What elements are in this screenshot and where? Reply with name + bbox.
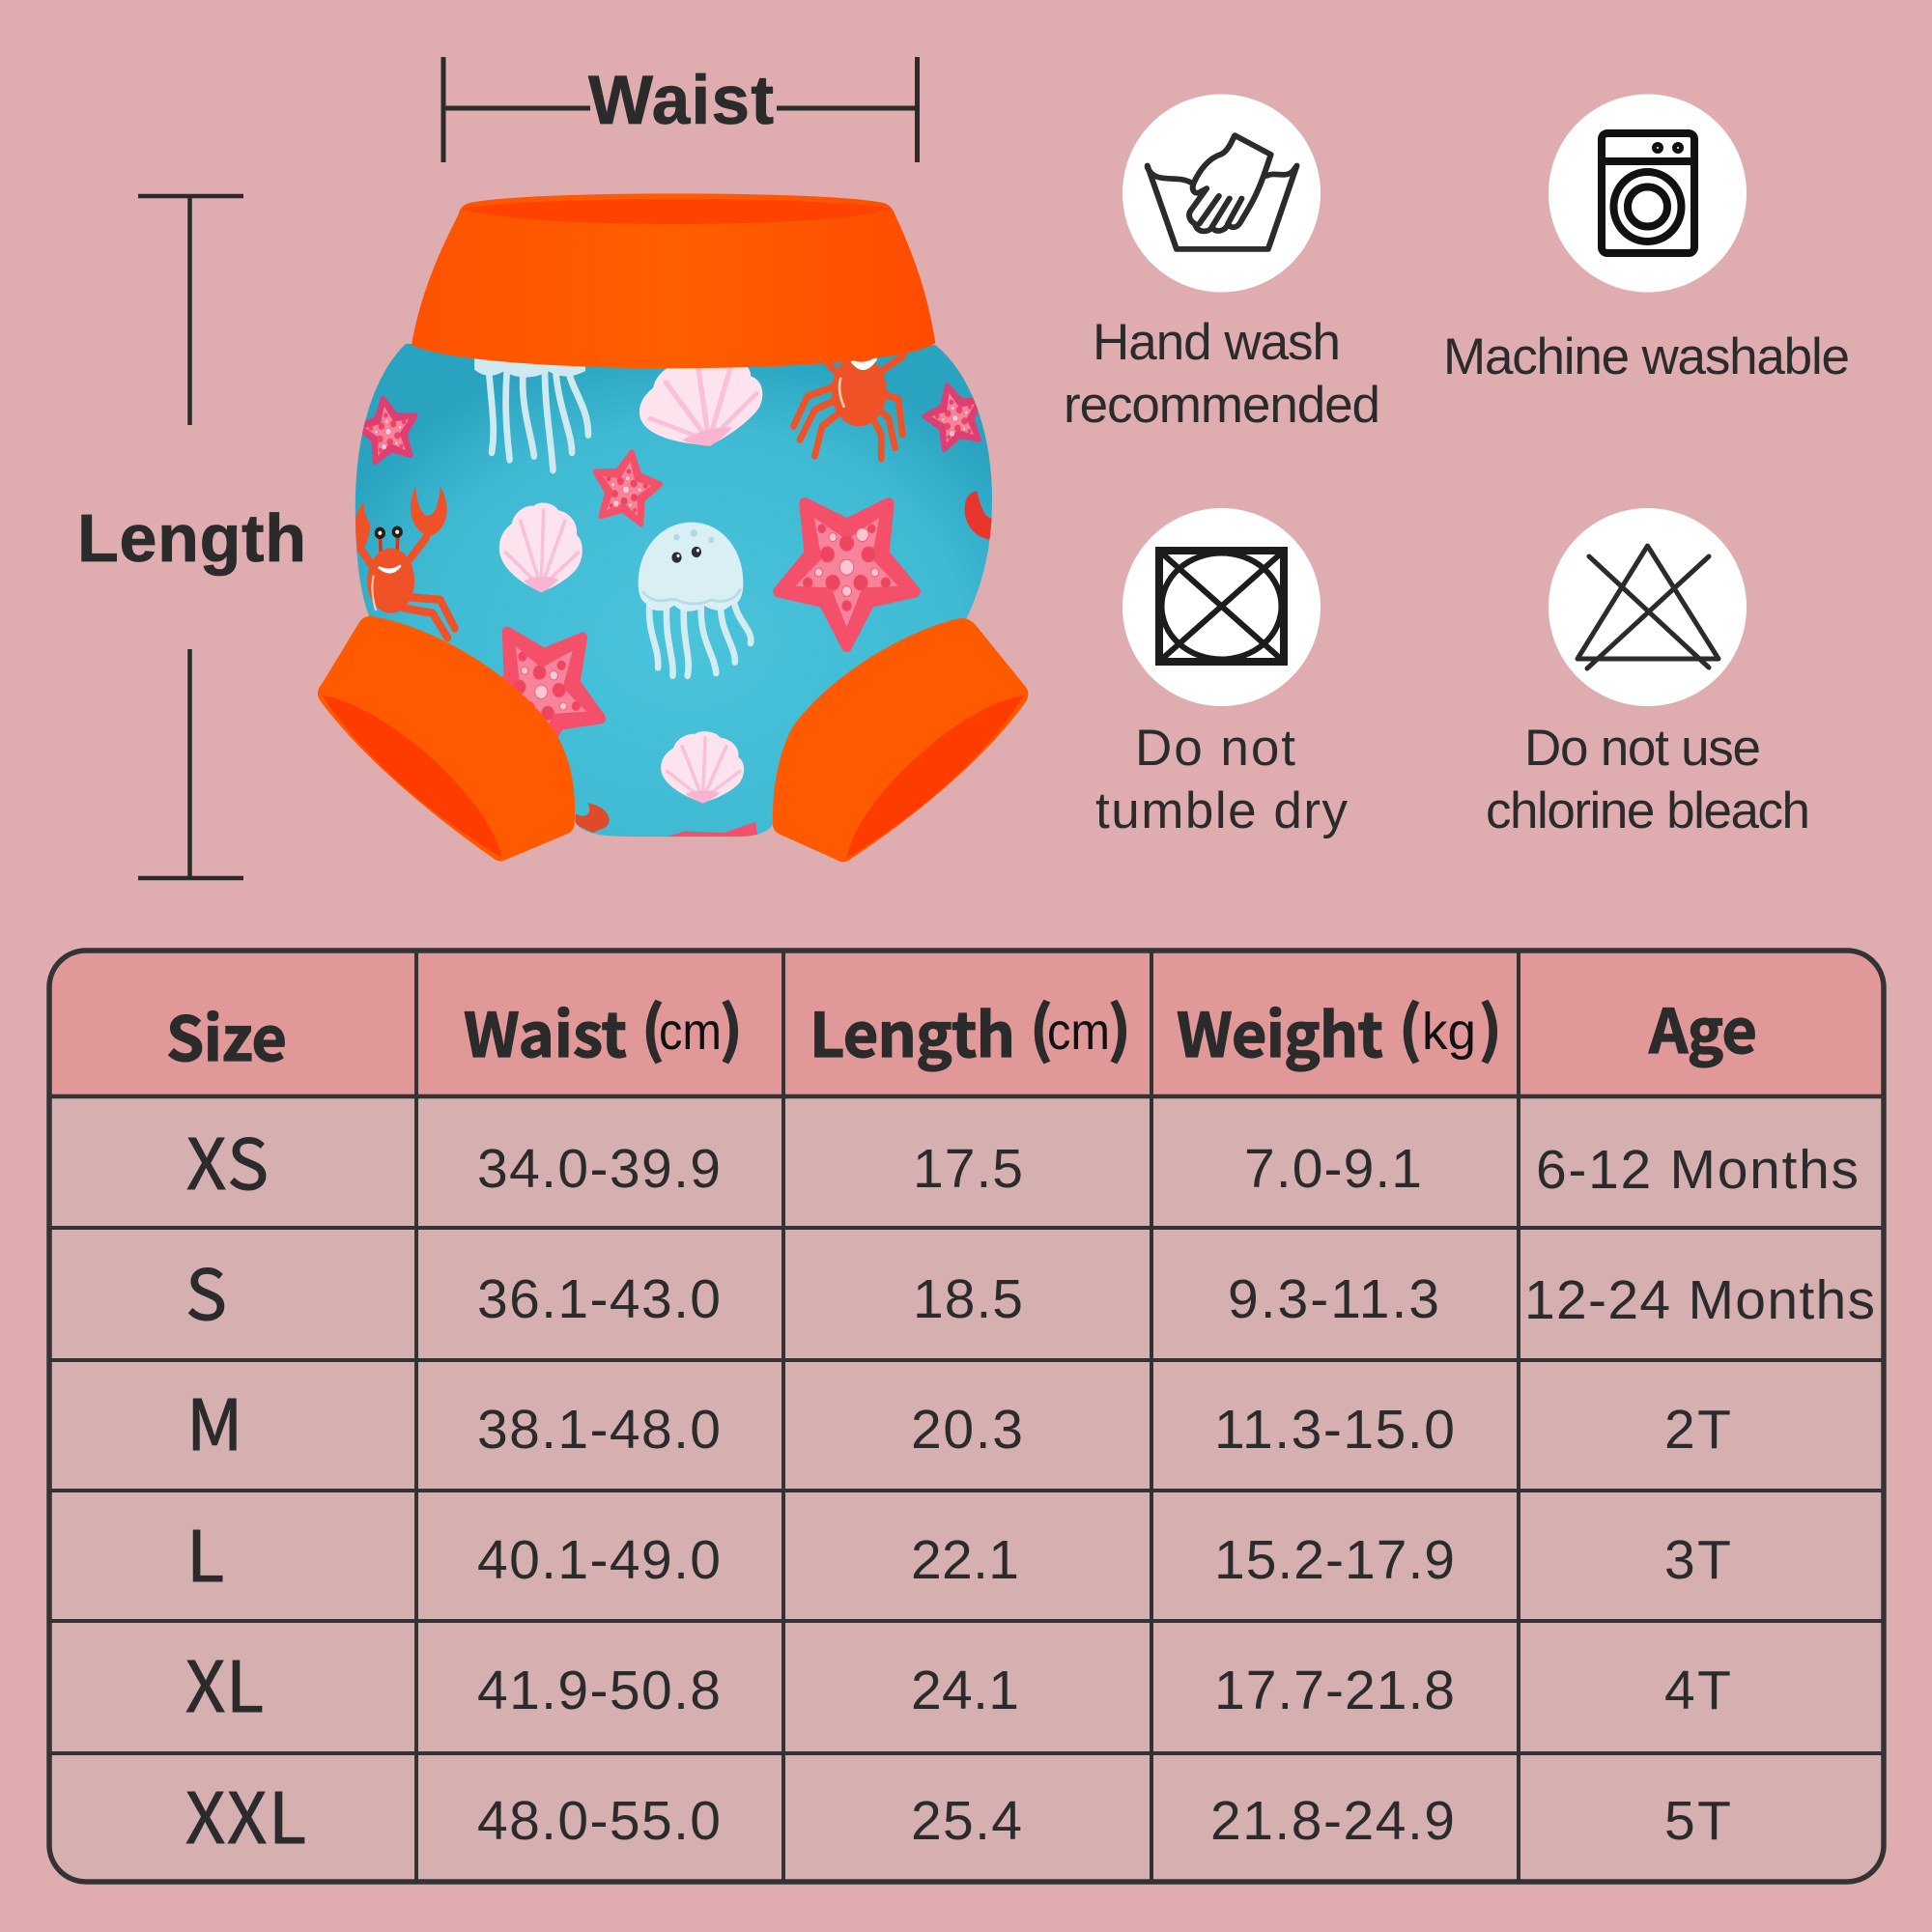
header: length: ) [1108,981,1131,1069]
size table [48,951,1884,1884]
left leg cuff [318,616,575,861]
starfish left edge [362,396,418,466]
length label: Length [77,500,306,576]
row XS: 34.0-39.9 [477,1138,721,1200]
crab claw right edge [965,492,992,540]
caption: do not tumble dry: Do not [1135,720,1295,777]
caption: do not tumble dry [1095,720,1349,839]
row XL: 4T [1664,1660,1731,1721]
row M: M [186,1369,242,1470]
row XS: 17.5 [913,1138,1023,1200]
crab top right body [832,355,887,426]
caption: hand wash: recommended [1064,377,1380,434]
table fills [48,951,1884,1884]
row L [186,1500,1731,1602]
caption: hand wash [1064,314,1380,434]
header: weight: ) [1479,981,1502,1069]
header: age: Age [1648,983,1757,1071]
caption: hand wash: Hand wash [1093,314,1341,371]
length measure bracket [138,196,243,878]
header: waist: ) [720,981,743,1069]
row S [185,1238,1875,1340]
header: length: ( [1030,981,1053,1069]
row XL: 41.9-50.8 [477,1660,721,1721]
jellyfish centre [639,523,751,675]
starfish bottom edge [667,822,758,838]
caption: machine washable: Machine washable [1443,328,1850,385]
row S: 9.3-11.3 [1228,1268,1439,1330]
row L: 15.2-17.9 [1214,1529,1455,1591]
row S: S [185,1238,227,1340]
printed body [355,344,992,837]
starfish small [589,446,665,526]
swim diaper illustration [318,193,1028,862]
waist band [412,193,935,368]
table grid [50,951,1883,1882]
row L: 22.1 [911,1529,1019,1591]
crab top right legs [793,355,903,459]
caption: no chlorine bleach: Do not use [1524,720,1761,777]
crab bottom fragment [576,803,610,833]
header: length [810,981,1131,1075]
care icon: machine washable [1548,95,1747,292]
header: waist: cm [659,1003,722,1061]
row XXL [185,1762,1731,1863]
care icon: do not tumble dry [1122,508,1321,706]
row XL: XL [185,1631,264,1732]
header: waist: ( [641,981,665,1069]
right leg cuff [773,618,1028,862]
crab left [355,486,455,638]
sea creature print [355,342,992,838]
care icon: hand wash [1122,95,1321,292]
row XL: 24.1 [911,1660,1019,1721]
row XXL: 21.8-24.9 [1210,1790,1455,1852]
header: length: cm [1047,1003,1110,1061]
care icon: no chlorine bleach [1548,508,1747,706]
starfish under left leg [502,626,607,737]
row XXL: 48.0-55.0 [477,1790,721,1852]
row M: 2T [1664,1399,1731,1461]
row S: 12-24 Months [1524,1269,1875,1331]
row M: 38.1-48.0 [477,1399,721,1461]
row XS: 7.0-9.1 [1244,1138,1422,1200]
header: size: Size [166,991,287,1079]
row XL [185,1631,1731,1732]
header: waist [464,981,743,1075]
shell centre left [499,502,582,593]
row M: 11.3-15.0 [1214,1399,1455,1461]
header: weight [1177,981,1502,1075]
row XXL: XXL [185,1762,306,1863]
shell bottom [661,731,744,804]
table border [49,951,1884,1882]
jellyfish top [474,350,588,469]
row XS: XS [186,1108,269,1209]
header: weight: ( [1399,981,1422,1069]
row M: 20.3 [911,1399,1023,1461]
row XS [186,1108,1859,1209]
row XS: 6-12 Months [1536,1139,1859,1201]
waist label: Waist [588,63,774,139]
header: waist: Waist [464,987,627,1075]
row L: 40.1-49.0 [477,1529,721,1591]
waist measure bracket [443,57,918,162]
header: length: Length [810,987,1015,1075]
row S: 18.5 [913,1268,1023,1330]
starfish right edge [922,383,981,452]
row L: L [186,1500,224,1602]
starfish big [779,503,915,646]
shell top [639,367,763,446]
caption: no chlorine bleach: chlorine bleach [1486,782,1810,839]
row XXL: 25.4 [911,1790,1022,1852]
row L: 3T [1664,1529,1731,1591]
caption: do not tumble dry: tumble dry [1095,782,1349,839]
header: weight: Weight [1177,987,1383,1075]
row XXL: 5T [1664,1790,1731,1852]
row XL: 17.7-21.8 [1214,1660,1455,1721]
row M [186,1369,1731,1470]
caption: no chlorine bleach [1486,720,1810,839]
row S: 36.1-43.0 [477,1268,721,1330]
header: weight: kg [1422,1003,1476,1061]
